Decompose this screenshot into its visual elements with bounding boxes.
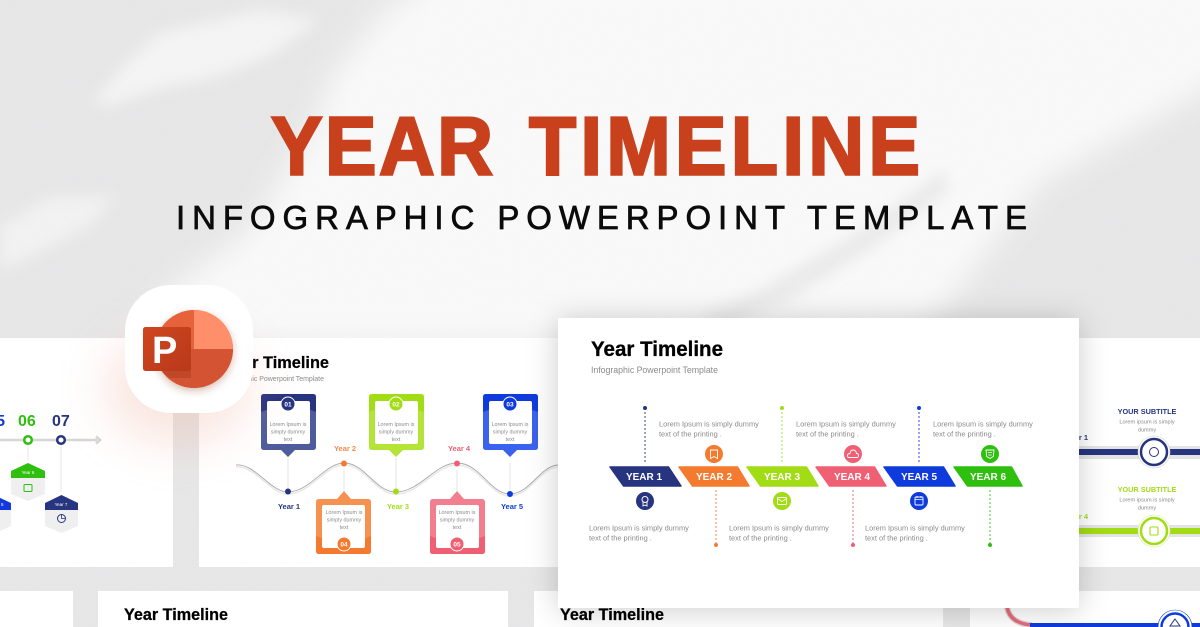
callout 04: Lorem Ipsum is: [326, 510, 363, 516]
numbers 05 06 07: 06: [18, 413, 36, 430]
year labels: Year 5: [501, 502, 523, 511]
node markers: [24, 436, 65, 492]
icon: bookmark: [705, 445, 723, 463]
icon: award: [636, 492, 654, 510]
text blocks above the timeline: text of the printing .: [933, 430, 996, 438]
year labels: Year 4: [448, 444, 471, 453]
text blocks below the timeline: [589, 524, 965, 542]
callout 02: 02: [392, 402, 400, 408]
year 1 chevron: [610, 467, 681, 486]
text blocks above the timeline: Lorem Ipsum is simply dummy: [659, 420, 759, 428]
row 2 text: YOUR SUBTITLE: [1118, 485, 1177, 494]
text blocks above the timeline: text of the printing .: [796, 430, 859, 438]
row 2 text: Lorem ipsum is simply: [1119, 498, 1175, 504]
callout 04: text: [340, 525, 349, 531]
callout 05: text: [453, 525, 462, 531]
panel: bottom slide 2: Year Timeline: [124, 606, 228, 624]
text blocks above the timeline: Lorem Ipsum is simply dummy: [933, 420, 1033, 428]
callout 04: simply dummy: [327, 518, 362, 524]
subtitle: INFOGRAPHIC POWERPOINT TEMPLATE: [176, 199, 1027, 236]
callout 02: [369, 394, 424, 457]
year labels: Year 3: [387, 502, 409, 511]
connector end dots: [643, 406, 992, 547]
year 3 chevron: [747, 467, 818, 486]
row 2 text: dummy: [1138, 506, 1156, 512]
panel: left slide with hexagon timeline: [0, 338, 173, 567]
year 5 chevron: YEAR 5: [901, 472, 937, 483]
callout 01: simply dummy: [271, 430, 306, 436]
row 2 text: [1118, 485, 1177, 512]
callout 01: 01: [284, 402, 292, 408]
callout 02: text: [392, 437, 401, 443]
icon: PowerPoint logo tile: [125, 285, 253, 413]
title: [271, 99, 920, 192]
panel: bottom slide 3: Year Timeline: [560, 606, 664, 624]
hexagon: year 6: [11, 463, 45, 501]
wave line: [236, 463, 558, 496]
row 1: navy line with icon: [1070, 436, 1200, 468]
text blocks below the timeline: text of the printing .: [729, 534, 792, 542]
slide heading: Year Timeline: [224, 354, 329, 372]
hexagon: year 5: 5: [1, 502, 4, 507]
wave markers: [285, 460, 513, 497]
icon glow: [106, 333, 250, 443]
clipped year labels: Year 4: [1066, 512, 1089, 521]
text blocks above the timeline: [659, 420, 1033, 438]
year labels: [278, 444, 523, 511]
callout 05: [430, 491, 485, 554]
panel: bottom slide 2: [98, 591, 508, 627]
row 1 text: Lorem ipsum is simply: [1119, 420, 1175, 426]
year 6 chevron: [954, 467, 1022, 486]
callout 05: Lorem Ipsum is: [439, 510, 476, 516]
main slide heading: Year Timeline: [591, 338, 723, 361]
callout 03: [483, 394, 538, 457]
callout 03: simply dummy: [493, 430, 528, 436]
text blocks below the timeline: text of the printing .: [865, 534, 928, 542]
hexagon: year 5: [0, 495, 11, 533]
row 1 text: YOUR SUBTITLE: [1118, 407, 1177, 416]
timeline arrow: [0, 436, 100, 444]
panel: wave timeline slide: [199, 338, 569, 567]
text blocks below the timeline: Lorem Ipsum is simply dummy: [589, 524, 689, 532]
text blocks above the timeline: text of the printing .: [659, 430, 722, 438]
panel: main slide with chevron timeline: [558, 318, 1079, 608]
year 1 chevron: YEAR 1: [626, 472, 662, 483]
callout 05: 05: [453, 542, 461, 548]
callout 03: 03: [506, 402, 514, 408]
callout 04: 04: [340, 542, 348, 548]
panel: bottom slide 1: [0, 591, 73, 627]
callout 02: simply dummy: [379, 430, 414, 436]
text blocks above the timeline: Lorem Ipsum is simply dummy: [796, 420, 896, 428]
callout 01: Lorem Ipsum is: [270, 422, 307, 428]
clipped year labels: [1066, 433, 1089, 521]
year 6 chevron: YEAR 6: [970, 472, 1006, 483]
dashed connectors with end dots: [645, 408, 990, 545]
callout 01: text: [284, 437, 293, 443]
logo P tile: P: [152, 330, 177, 372]
icon: envelope: [773, 492, 791, 510]
year labels: Year 1: [278, 502, 300, 511]
logo disc: [155, 310, 233, 388]
main slide subheading: Infographic Powerpoint Template: [591, 365, 718, 375]
callout 01: [261, 394, 316, 457]
callout 02: Lorem Ipsum is: [378, 422, 415, 428]
row 2: lime line with icon: [1070, 515, 1200, 547]
row 1 text: [1118, 407, 1177, 434]
hexagon: year 6: Year 6: [22, 470, 35, 475]
callout 05: simply dummy: [440, 518, 475, 524]
panel: bottom slide 4: [970, 591, 1200, 627]
slide subheading: Infographic Powerpoint Template: [223, 376, 324, 383]
panel: right slide with subtitles: [1060, 338, 1200, 567]
text blocks below the timeline: Lorem Ipsum is simply dummy: [865, 524, 965, 532]
callout 03: Lorem Ipsum is: [492, 422, 529, 428]
year 4 chevron: YEAR 4: [834, 472, 870, 483]
year 5 chevron: [884, 467, 955, 486]
logo fold shadow: [150, 331, 191, 378]
callout 04: [316, 491, 371, 554]
hexagon: year 7: [45, 495, 78, 533]
icon: cloud: [844, 445, 862, 463]
panel: bottom slide 3: [534, 591, 943, 627]
clipped year labels: Year 1: [1066, 433, 1088, 442]
text blocks below the timeline: text of the printing .: [589, 534, 652, 542]
icon: calendar: [910, 492, 928, 510]
row 1 text: dummy: [1138, 428, 1156, 434]
callout 03: text: [506, 437, 515, 443]
numbers 05 06 07: [0, 413, 70, 430]
text blocks below the timeline: Lorem Ipsum is simply dummy: [729, 524, 829, 532]
year 3 chevron: YEAR 3: [764, 472, 800, 483]
year 4 chevron: [816, 467, 886, 486]
year 2 chevron: [679, 467, 749, 486]
title: YEAR: [271, 99, 493, 192]
connector lines: [288, 458, 510, 491]
title: TIMELINE: [529, 99, 920, 192]
icon: badge: [981, 445, 999, 463]
numbers 05 06 07: 07: [52, 413, 70, 430]
year labels: Year 2: [334, 444, 356, 453]
year 2 chevron: YEAR 2: [696, 472, 732, 483]
hexagon: year 7: Year 7: [55, 502, 68, 507]
